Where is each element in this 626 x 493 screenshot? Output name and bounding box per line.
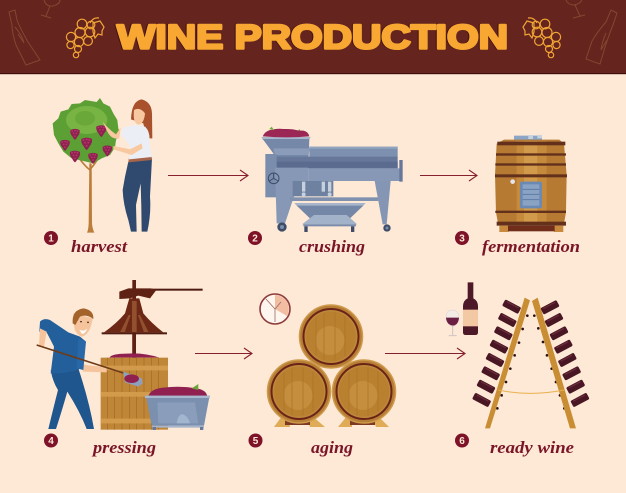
label: ready wine: ready wine	[490, 438, 574, 457]
figure: woman picking grapes	[103, 99, 152, 232]
step 2: crushing machine	[261, 127, 403, 232]
icon: grape tree	[53, 98, 120, 233]
icon: bottle right	[586, 10, 617, 64]
vat of grapes	[101, 353, 168, 430]
number 3: 3	[459, 234, 465, 244]
barrels stack	[268, 305, 396, 427]
number 3	[455, 231, 469, 245]
icon: glass left	[41, 0, 60, 18]
label: fermentation: fermentation	[482, 237, 580, 256]
number 5: 5	[253, 436, 259, 447]
wine press	[102, 280, 203, 358]
icon: grapes right	[523, 18, 561, 58]
header band	[0, 0, 626, 74]
icon: wine bottle	[463, 282, 478, 335]
number 5	[248, 434, 262, 448]
number 6: 6	[459, 436, 465, 447]
icon: grapes left	[66, 18, 104, 58]
arrow 4	[385, 348, 465, 359]
step 1: harvest	[53, 98, 152, 233]
arrow 1	[168, 170, 248, 181]
icon: glass right	[566, 0, 585, 18]
number 6	[455, 434, 469, 448]
wheel	[268, 173, 279, 184]
number 2	[248, 231, 262, 245]
step 4: pressing	[37, 280, 210, 430]
label: crushing: crushing	[299, 237, 366, 256]
step 5: aging	[260, 294, 396, 427]
label: pressing: pressing	[91, 438, 157, 457]
hopper	[294, 203, 366, 206]
number 1	[44, 231, 58, 245]
step 6: ready wine	[446, 282, 590, 428]
number 2: 2	[252, 234, 258, 244]
figure: worker with shovel	[37, 308, 143, 429]
label: aging: aging	[311, 438, 354, 457]
riddling rack	[472, 298, 590, 428]
title: WINE PRODUCTION	[117, 18, 508, 56]
icon: clock	[260, 294, 290, 324]
step 3: fermentation barrel	[495, 135, 567, 232]
number 4	[44, 434, 58, 448]
grape tub	[145, 384, 210, 430]
number 1: 1	[48, 234, 54, 244]
number 4: 4	[48, 436, 54, 447]
icon: bottle left	[9, 10, 40, 65]
arrow 3	[195, 348, 252, 359]
arrow 2	[420, 170, 477, 181]
label: harvest: harvest	[71, 237, 128, 256]
grape pile	[263, 129, 308, 136]
icon: wine glass	[446, 310, 459, 336]
